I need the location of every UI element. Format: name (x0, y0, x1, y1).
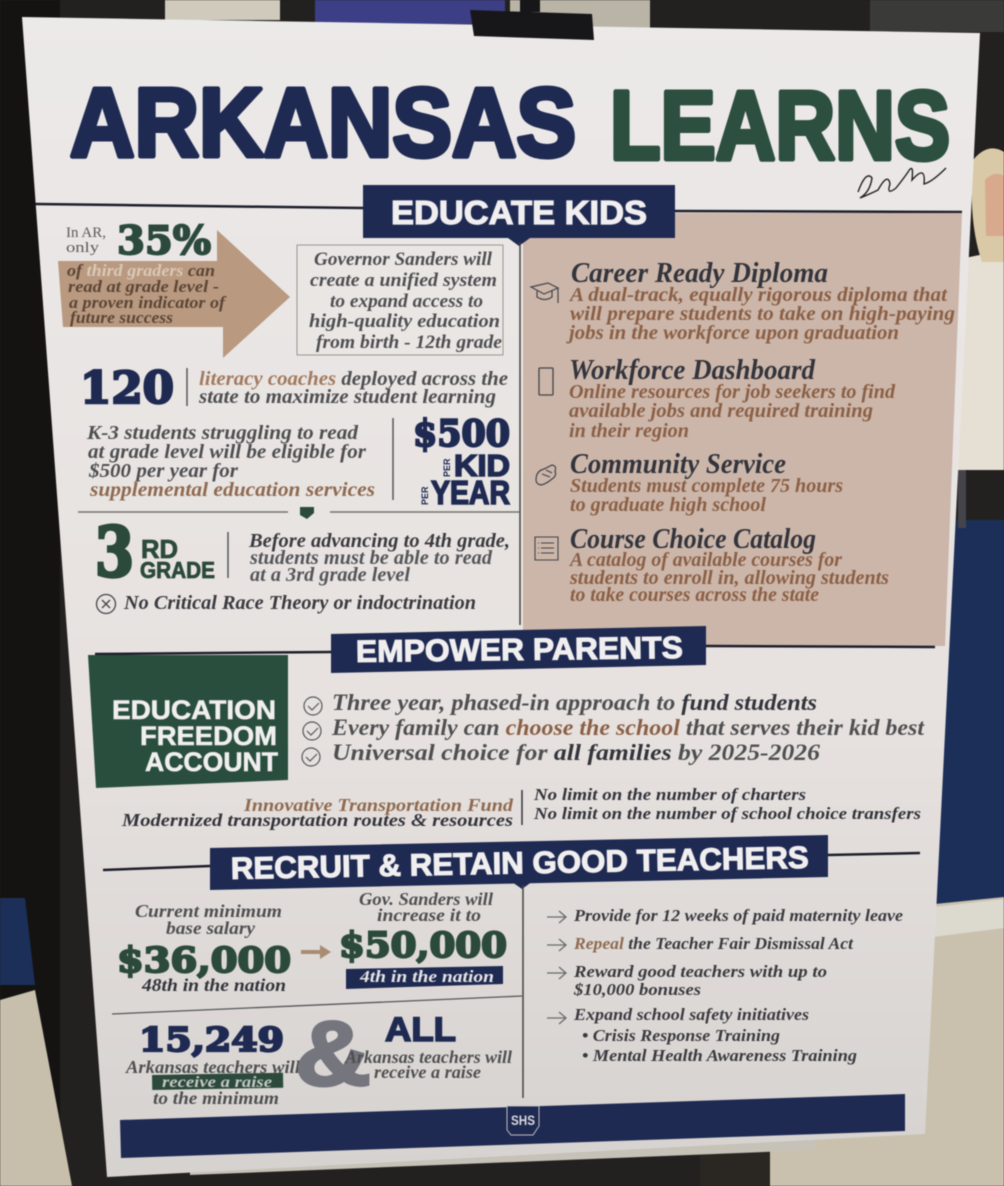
list: teacher benefits: Provide for 12 weeks of paid maternity leave (573, 906, 903, 925)
arrow: 35 percent statistic: 35% (117, 218, 211, 264)
text: innovative transportation fund: Innovative Transportation Fund (243, 795, 514, 815)
stat: all teachers: Arkansas teachers will (344, 1047, 512, 1067)
section rules (103, 853, 920, 870)
stat: 3rd grade requirement: 3 (95, 513, 134, 593)
list: teacher benefits: Expand school safety initiatives (573, 1005, 809, 1024)
stat: 15,249 teachers (125, 1020, 300, 1108)
salary: current minimum: Current minimum (135, 901, 282, 921)
stat: 120 literacy coaches: literacy coaches deployed across the (199, 368, 508, 390)
heading band: educate kids (363, 185, 675, 246)
stat: 500 dollars per kid per year: KID (454, 448, 510, 483)
icon: graduation cap (531, 283, 558, 303)
callout: unified system: to expand access to (330, 291, 483, 312)
section: educate kids (35, 185, 962, 646)
item: career ready diploma (531, 258, 955, 344)
checklist: Three year, phased-in approach to fund students (332, 690, 817, 715)
note: no critical race theory: No Critical Race Theory or indoctrination (123, 592, 476, 614)
text: K-3 reading support: at grade level will be eligible for (88, 441, 366, 463)
arrow: 35 percent statistic: of third graders can (67, 261, 215, 280)
item: workforce dashboard: Workforce Dashboard (569, 355, 816, 386)
stat: 500 dollars per kid per year: $500 (413, 413, 510, 455)
item: community service: Students must complete 75 hours (570, 475, 843, 497)
arrow: 35 percent statistic: future success (70, 308, 173, 327)
salary: current minimum: base salary (166, 918, 256, 938)
title: ARKANSAS (70, 68, 576, 177)
text: innovative transportation fund: Modernized transportation routes & resources (121, 810, 513, 830)
item: career ready diploma: will prepare students to take on high-paying (570, 303, 955, 325)
panel: education freedom account: ACCOUNT (145, 747, 278, 777)
callout: unified system (297, 245, 503, 355)
stat: 3rd grade requirement (95, 513, 510, 593)
salary: current minimum: $36,000 (117, 940, 291, 981)
icon: list (535, 537, 558, 560)
text: K-3 reading support (86, 422, 375, 501)
stat: 500 dollars per kid per year: PER (420, 486, 430, 505)
logo: SHS state shield (507, 1106, 539, 1135)
section: empower parents (88, 626, 935, 830)
text: K-3 reading support: K-3 students struggling to read (86, 422, 359, 444)
stat: 3rd grade requirement: at a 3rd grade level (250, 565, 411, 586)
salary: proposed minimum: 4th in the nation (359, 967, 494, 986)
footer band (120, 1094, 905, 1158)
item: workforce dashboard: in their region (569, 420, 689, 442)
stat: all teachers (344, 1011, 512, 1082)
divider (112, 996, 522, 1014)
list: teacher benefits: Reward good teachers with up to (573, 962, 827, 981)
stat: all teachers: ALL (385, 1011, 456, 1049)
title (70, 68, 950, 180)
salary: proposed minimum: $50,000 (339, 925, 507, 966)
item: course choice catalog: A catalog of available courses for (568, 549, 842, 571)
heading band: educate kids: EDUCATE KIDS (391, 194, 647, 231)
list: teacher benefits: Repeal the Teacher Fair Dismissal Act (573, 934, 854, 953)
text: innovative transportation fund (121, 795, 514, 830)
item: course choice catalog: to take courses across the state (570, 584, 819, 606)
stat: 500 dollars per kid per year: PER (442, 458, 452, 477)
divider with state shield (78, 507, 519, 519)
heading band: recruit and retain: RECRUIT & RETAIN GOOD TEACHERS (230, 840, 809, 886)
item: workforce dashboard: available jobs and required training (569, 400, 873, 422)
stat: 3rd grade requirement: GRADE (140, 557, 215, 583)
stat: 120 literacy coaches: 120 (80, 363, 174, 414)
panel: education freedom account (88, 655, 288, 788)
arrow: 35 percent statistic: read at grade level - (68, 277, 219, 296)
vertical divider (519, 242, 521, 625)
checklist: Every family can choose the school that serves their kid best (331, 715, 925, 740)
callout: unified system: create a unified system (310, 270, 497, 291)
checklist (302, 690, 925, 766)
signature (858, 168, 946, 198)
callout: unified system: high-quality education (309, 311, 500, 332)
item: course choice catalog: students to enroll in, allowing students (569, 567, 889, 589)
panel: career and workforce (523, 213, 962, 646)
arrow: salary increase (301, 945, 331, 959)
stat: 15,249 teachers: 15,249 (139, 1020, 284, 1059)
list: teacher benefits: • Crisis Response Training (582, 1026, 781, 1045)
section rules (95, 646, 935, 654)
item: community service: to graduate high school (570, 494, 766, 516)
arrow: 35 percent statistic: only (66, 240, 100, 256)
text: K-3 reading support: supplemental education services (89, 479, 375, 501)
text: no limits (533, 785, 921, 823)
panel: education freedom account: FREEDOM (140, 721, 277, 751)
item: community service (536, 449, 843, 516)
callout: unified system: Governor Sanders will (314, 249, 493, 270)
stat: 120 literacy coaches: state to maximize student learning (198, 386, 496, 408)
stat: 120 literacy coaches (80, 363, 508, 414)
text: no limits: No limit on the number of school choice transfers (533, 804, 921, 823)
stat: 3rd grade requirement: RD (141, 534, 178, 564)
stat: 3rd grade requirement: Before advancing to 4th grade, (248, 531, 510, 552)
stat: 500 dollars per kid per year (393, 413, 510, 511)
item: career ready diploma: Career Ready Diploma (571, 258, 828, 289)
list: teacher benefits (547, 906, 903, 1065)
salary: proposed minimum (339, 889, 507, 989)
item: community service: Community Service (570, 449, 786, 480)
item: workforce dashboard: Online resources for job seekers to find (569, 381, 896, 403)
salary: proposed minimum: Gov. Sanders will (359, 889, 493, 909)
ampersand: & (295, 1003, 371, 1105)
arrow: 35 percent statistic: a proven indicator of (69, 293, 227, 312)
item: career ready diploma: jobs in the workforce upon graduation (566, 322, 899, 344)
icon: helping hand (536, 465, 556, 485)
salary: proposed minimum: increase it to (377, 905, 481, 925)
salary: current minimum: 48th in the nation (141, 975, 286, 995)
callout: unified system: from birth - 12th grade (316, 332, 503, 353)
stat: 15,249 teachers: receive a raise (162, 1074, 272, 1091)
binder clip (470, 0, 594, 40)
item: course choice catalog: Course Choice Catalog (570, 524, 816, 555)
list: teacher benefits: $10,000 bonuses (573, 980, 701, 999)
stat: 15,249 teachers: Arkansas teachers will (125, 1057, 300, 1077)
arrow: 35 percent statistic: In AR, (66, 225, 106, 241)
heading band: empower parents: EMPOWER PARENTS (356, 630, 683, 669)
icon: device (539, 368, 553, 395)
item: workforce dashboard (539, 355, 896, 442)
list: teacher benefits: • Mental Health Awareness Training (582, 1046, 858, 1065)
logo: SHS state shield: SHS (511, 1112, 535, 1128)
checklist: Universal choice for all families by 2025-2026 (332, 740, 821, 765)
arrow: 35 percent statistic (58, 218, 290, 358)
title: LEARNS (610, 71, 950, 180)
stat: 15,249 teachers: to the minimum (153, 1088, 279, 1108)
stat: 500 dollars per kid per year: YEAR (431, 474, 510, 511)
vertical divider (522, 885, 524, 1098)
text: K-3 reading support: $500 per year for (88, 460, 238, 482)
panel: education freedom account: EDUCATION (112, 695, 276, 725)
text: no limits: No limit on the number of charters (533, 785, 806, 804)
stat: all teachers: receive a raise (374, 1062, 481, 1082)
arrows (547, 911, 566, 1024)
stat: 3rd grade requirement: students must be able to read (249, 548, 492, 569)
item: career ready diploma: A dual-track, equally rigorous diploma that (568, 284, 949, 306)
section rules (35, 204, 962, 212)
section: recruit and retain good teachers (103, 835, 920, 1108)
salary: current minimum (117, 901, 291, 995)
item: course choice catalog (535, 524, 889, 606)
